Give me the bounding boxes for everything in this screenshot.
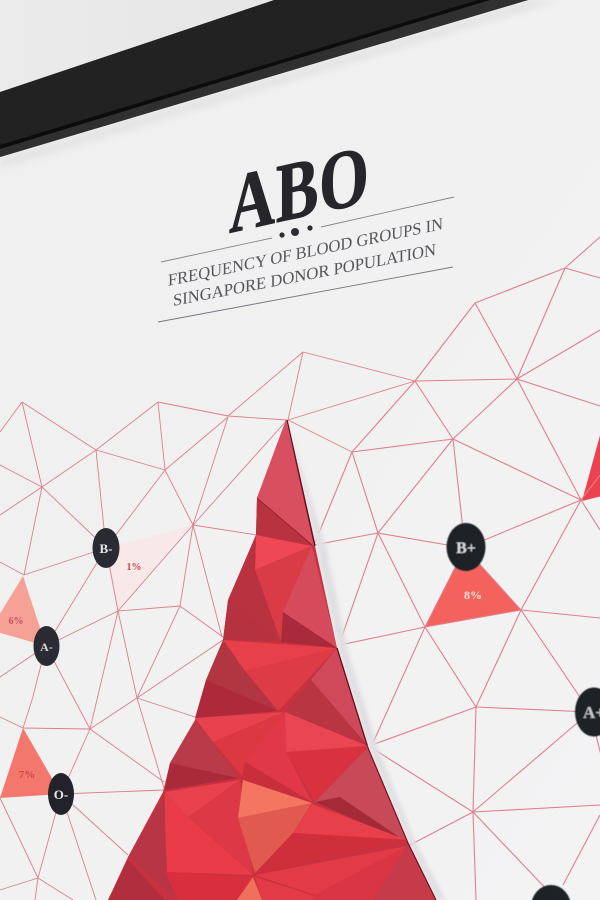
label: 6%: 6% bbox=[8, 616, 24, 627]
black poster frame bbox=[0, 0, 560, 168]
paper silhouette base bbox=[108, 420, 436, 900]
subtitle: SINGAPORE DONOR POPULATION bbox=[173, 240, 436, 310]
node: B+ bbox=[446, 523, 486, 571]
paper shadow on poster bbox=[288, 425, 446, 900]
label: 8%: 8% bbox=[464, 588, 482, 602]
title block bbox=[158, 128, 454, 322]
fold: top peak bbox=[256, 420, 315, 546]
node: B+: B+ bbox=[456, 540, 476, 557]
filled triangle: B- 1% bbox=[106, 525, 193, 611]
fold: bottom left bbox=[108, 796, 315, 900]
label: 1%: 1% bbox=[126, 562, 142, 573]
filled triangle: A- 6% bbox=[0, 576, 46, 646]
filled triangle: B+ 8% bbox=[425, 548, 521, 627]
upper rule bbox=[161, 197, 454, 262]
subtitle: FREQUENCY OF BLOOD GROUPS IN bbox=[168, 214, 443, 290]
title: ABO: ABO bbox=[229, 128, 370, 252]
lower rule bbox=[158, 267, 453, 322]
label: 7%: 7% bbox=[19, 769, 35, 781]
node: B- bbox=[92, 528, 120, 568]
fold: fifth row with highlighted centre bbox=[165, 748, 436, 900]
node: O- bbox=[48, 773, 74, 815]
filled triangle: O- 7% bbox=[0, 728, 61, 798]
three dots ornament bbox=[279, 225, 313, 238]
fold: fourth row bbox=[165, 712, 408, 843]
fold: third row bbox=[195, 640, 368, 748]
fold: second row bbox=[223, 535, 337, 648]
node: A- bbox=[34, 626, 60, 666]
node: B-: B- bbox=[100, 541, 112, 556]
polygon mesh left bbox=[0, 352, 415, 900]
wall above frame bbox=[0, 0, 280, 93]
node: A+ bbox=[575, 688, 600, 736]
filled triangle: right edge bbox=[582, 428, 600, 501]
node: O-: O- bbox=[54, 787, 68, 802]
origami paper peak bbox=[108, 420, 446, 900]
polygon mesh right bbox=[314, 237, 600, 900]
node: A-: A- bbox=[40, 640, 53, 654]
node: bottom partially cropped bbox=[531, 885, 571, 900]
